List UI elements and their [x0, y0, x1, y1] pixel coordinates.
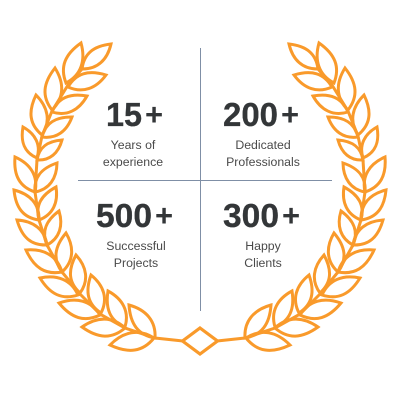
stat: successful projects: Successful: [106, 239, 166, 253]
stat: happy clients: 300: [223, 197, 279, 234]
stat: years of experience: 15: [106, 96, 142, 133]
horizontal divider: [78, 180, 332, 182]
left laurel branch: [8, 38, 183, 354]
stat: happy clients: [223, 197, 300, 270]
stat: dedicated professionals: [223, 96, 300, 169]
stat: years of experience: +: [145, 97, 163, 132]
stat: dedicated professionals: 200: [223, 96, 278, 133]
stat: years of experience: Years of: [111, 138, 156, 152]
stat: dedicated professionals: Dedicated: [235, 138, 291, 152]
stat: successful projects: [96, 197, 173, 270]
stat: dedicated professionals: Professionals: [226, 155, 300, 169]
stat: happy clients: +: [282, 198, 300, 233]
stat: successful projects: Projects: [114, 256, 158, 270]
stat: happy clients: Clients: [244, 256, 282, 270]
stat: successful projects: 500: [96, 197, 152, 234]
vertical divider: [200, 48, 202, 311]
stat: years of experience: experience: [103, 155, 163, 169]
icon: diamond ornament: [182, 328, 218, 354]
stat: years of experience: [103, 96, 163, 169]
stat: dedicated professionals: +: [281, 97, 299, 132]
stat: happy clients: Happy: [245, 239, 282, 253]
right laurel branch: [217, 38, 392, 354]
stat: successful projects: +: [155, 198, 173, 233]
